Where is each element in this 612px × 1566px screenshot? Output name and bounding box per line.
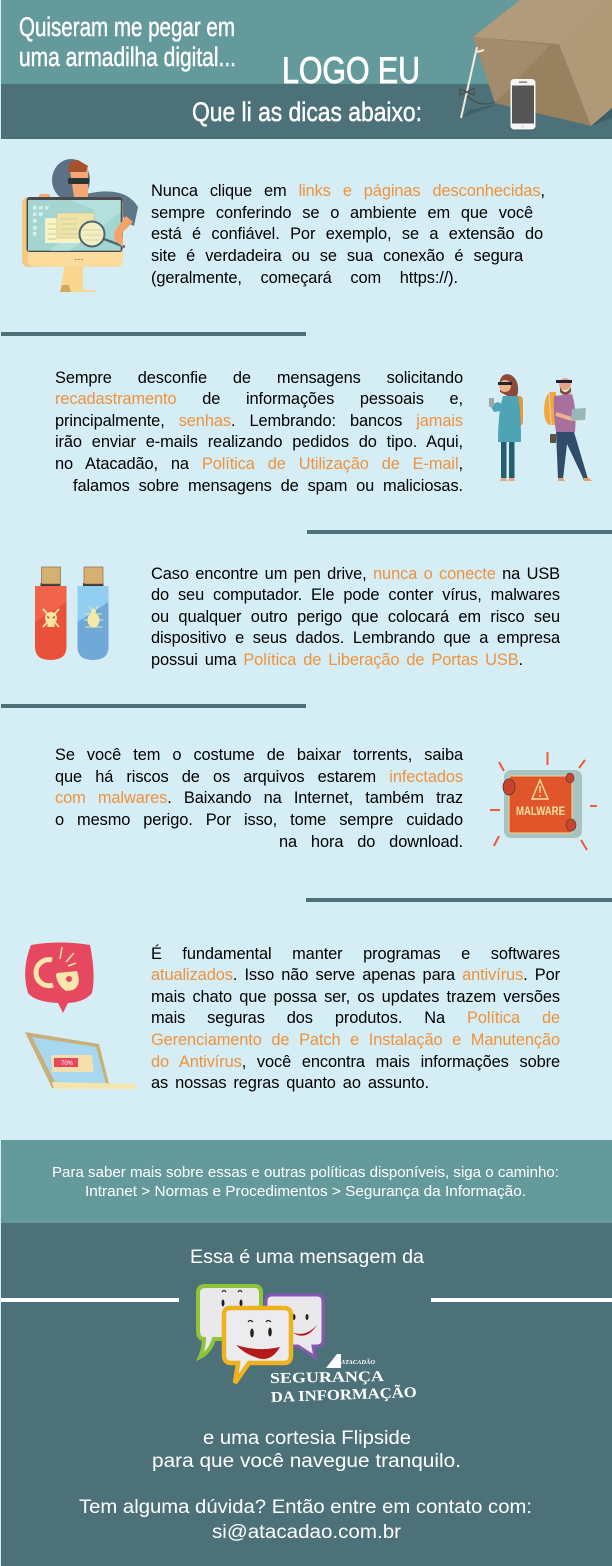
text block: tip about updates: atualizados. Isso não serve apenas para antivírus. Por	[151, 966, 560, 984]
title: header headline: Quiseram me pegar em	[19, 12, 235, 42]
text block: tip about suspicious messages: irão enviar e-mails realizando pedidos do tipo. Aqui,	[55, 433, 463, 451]
text block: tip about links: sempre conferindo se o ambiente em que você	[151, 204, 533, 222]
text block: tip about torrents: com malwares. Baixando na Internet, também traz	[55, 789, 463, 807]
text block: tip about pen drives: possui uma Política de Liberação de Portas USB.	[151, 651, 523, 669]
title: header headline: Que li as dicas abaixo:	[192, 97, 422, 127]
footer: message heading: Essa é uma mensagem da	[190, 1247, 424, 1268]
icon: two masked travellers	[489, 374, 592, 481]
text block: tip about suspicious messages: principalmente, senhas. Lembrando: bancos jamais	[55, 412, 463, 430]
text block: tip about links: Nunca clique em links e páginas desconhecidas,	[151, 182, 545, 200]
footer: Flipside courtesy text	[152, 1428, 461, 1472]
text block: tip about updates: Gerenciamento de Patch e Instalação e Manutenção	[151, 1031, 560, 1049]
text block: tip about torrents: que há riscos de os arquivos estarem infectados	[55, 768, 463, 786]
icon: malware warning tablet	[490, 752, 597, 850]
text block: tip about suspicious messages	[55, 368, 463, 495]
text block: tip about updates: mais chato que possa ser, os updates trazem versões	[151, 988, 560, 1006]
text block: tip about torrents	[55, 746, 464, 851]
logo: Segurança da Informação speech bubbles: DA INFORMAÇÃO	[271, 1383, 417, 1406]
footer: Flipside courtesy text: para que você navegue tranquilo.	[152, 1451, 461, 1472]
icon: infected USB pen drives	[35, 567, 108, 660]
text block: tip about pen drives: do seu computador. Ele pode conter vírus, malwares	[151, 586, 560, 604]
text block: tip about updates: É fundamental manter programas e softwares	[151, 944, 560, 962]
text block: tip about suspicious messages: no Atacadão, na Política de Utilização de E-mail,	[55, 455, 463, 473]
text block: tip about updates: do Antivírus, você encontra mais informações sobre	[151, 1053, 560, 1071]
text block: tip about pen drives: Caso encontre um pen drive, nunca o conecte na USB	[151, 564, 560, 582]
logo: Segurança da Informação speech bubbles	[198, 1286, 417, 1406]
text block: tip about pen drives: dispositivo e seus dados. Lembrando que a empresa	[151, 629, 560, 647]
icon: hacker behind monitor	[22, 159, 138, 292]
footer: Flipside courtesy text: e uma cortesia Flipside	[203, 1428, 411, 1449]
title: header headline	[19, 12, 422, 127]
footer: policy path text	[52, 1165, 559, 1200]
text block: tip about torrents: Se você tem o costume de baixar torrents, saiba	[55, 746, 463, 764]
text block: tip about updates	[151, 944, 560, 1092]
logo: Segurança da Informação speech bubbles: SEGURANÇA	[270, 1369, 384, 1387]
text block: tip about links: site é verdadeira ou se sua conexão é segura	[151, 247, 523, 265]
logo: Segurança da Informação speech bubbles: ATACADÃO	[340, 1358, 376, 1366]
icon: box trap with smartphone bait	[460, 0, 612, 131]
footer: policy path text: Intranet > Normas e Procedimentos > Segurança da Informação.	[85, 1184, 526, 1200]
footer: policy path text: Para saber mais sobre essas e outras políticas disponíveis, siga o caminho:	[52, 1165, 559, 1181]
icon: laptop with progress dialog	[25, 1032, 136, 1089]
footer: contact text: si@atacadao.com.br	[212, 1522, 402, 1543]
text block: tip about links: está é confiável. Por exemplo, se a extensão do	[151, 225, 543, 243]
text block: tip about updates: as nossas regras quanto ao assunto.	[151, 1074, 429, 1092]
text block: tip about torrents: o mesmo perigo. Por isso, tome sempre cuidado	[55, 811, 463, 829]
text block: tip about torrents: na hora do download.	[279, 833, 463, 851]
text block: tip about suspicious messages: falamos sobre mensagens de spam ou maliciosas.	[73, 477, 463, 495]
title: header headline: LOGO EU	[282, 50, 420, 91]
text block: tip about pen drives	[151, 564, 560, 669]
text block: tip about pen drives: ou qualquer outro perigo que colocará em risco seu	[151, 608, 560, 626]
footer: contact text	[79, 1497, 532, 1543]
footer: contact text: Tem alguma dúvida? Então entre em contato com:	[79, 1497, 532, 1518]
icon: laptop with progress dialog: 70%	[61, 1061, 74, 1067]
text block: tip about links	[151, 182, 545, 287]
text block: tip about suspicious messages: Sempre desconfie de mensagens solicitando	[55, 368, 463, 386]
title: header headline: uma armadilha digital...	[19, 42, 236, 72]
text block: tip about suspicious messages: recadastramento de informações pessoais e,	[55, 390, 463, 408]
icon: malware warning tablet: MALWARE	[516, 804, 565, 818]
text block: tip about updates: mais seguras dos produtos. Na Política de	[151, 1009, 560, 1027]
icon: red speech bubble with broken padlock	[25, 942, 94, 1013]
text block: tip about links: (geralmente, começará com https://).	[151, 269, 458, 287]
